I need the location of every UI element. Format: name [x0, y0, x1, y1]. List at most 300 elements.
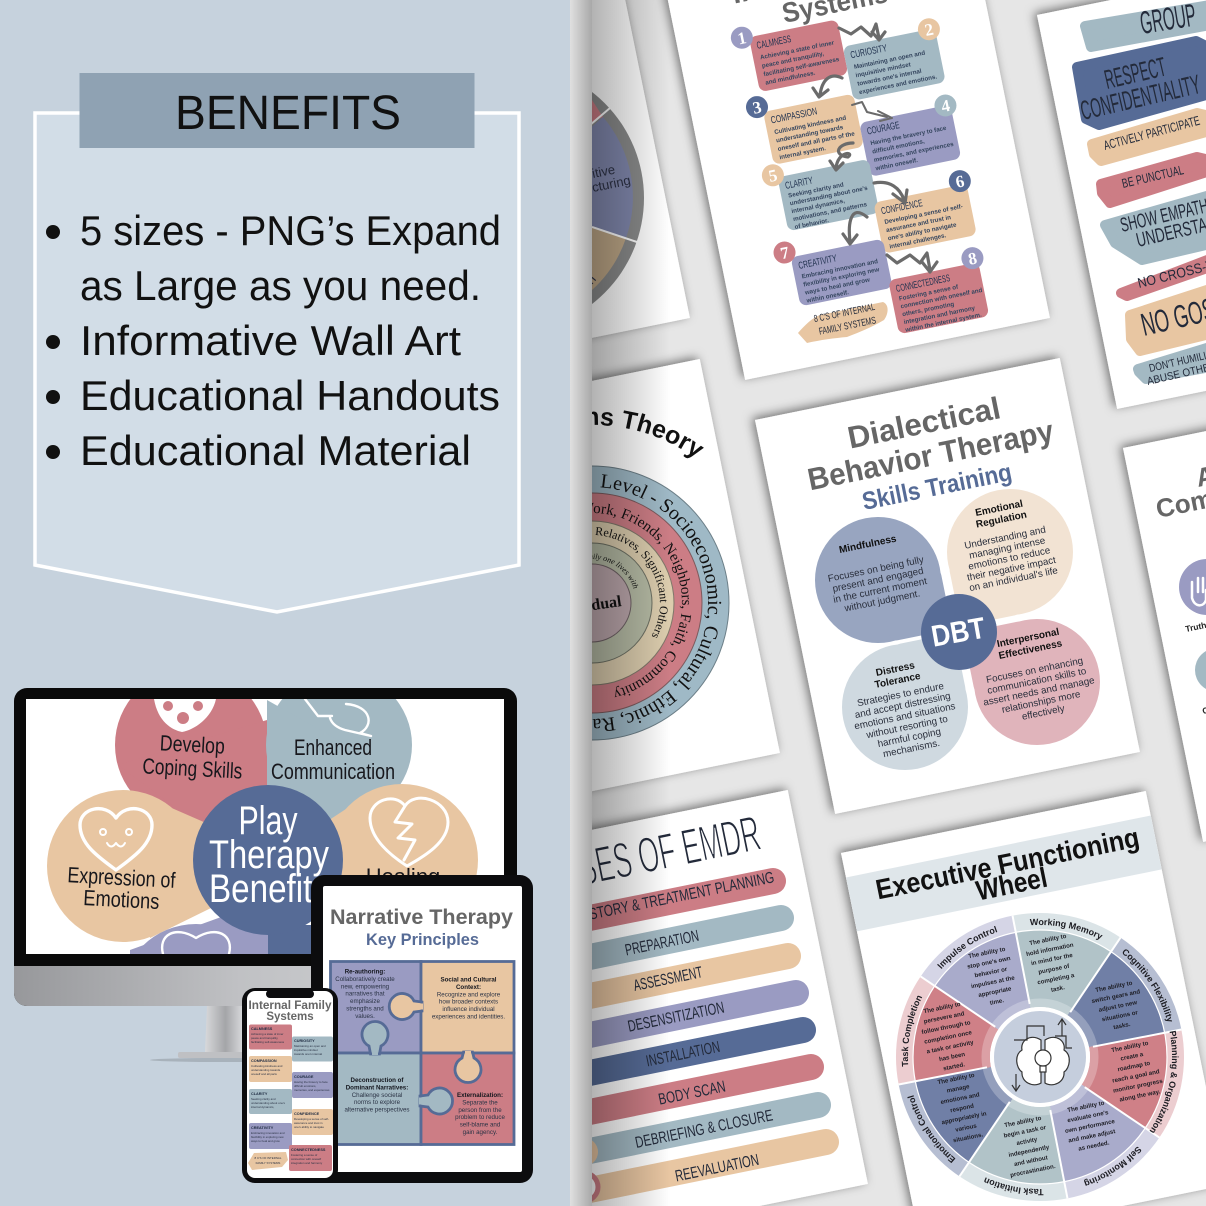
tablet screen: [323, 886, 522, 1172]
number badges: 1: [736, 28, 748, 48]
wheel segment descriptions: own performance: [1064, 1118, 1116, 1135]
phone mini boxes: CONNECTEDNESS: [291, 1148, 326, 1152]
card: group rules: [1037, 0, 1206, 409]
phone mini boxes: flexibility in exploring new: [251, 1135, 285, 1139]
petal: mindfulness: Focuses on being fully: [827, 555, 925, 585]
petal: distress tolerance: and accept distressing: [854, 691, 952, 721]
box: calmness: [749, 19, 848, 92]
petal: enhanced communication: Communication: [271, 759, 395, 784]
box: curiosity: CURIOSITY: [850, 43, 888, 61]
box: courage: COURAGE: [866, 120, 901, 138]
petal: healing: [268, 784, 478, 936]
box: connectedness: [888, 262, 989, 335]
box: clarity: understanding about one's: [789, 185, 869, 207]
box: courage: [859, 104, 961, 177]
box: confidence: assurance and trust in: [886, 214, 952, 234]
box: clarity: Seeking clarity and: [788, 181, 844, 200]
box: confidence: internal challenges.: [889, 232, 947, 251]
petal: enhanced communication: [266, 672, 412, 860]
number badges: 2: [923, 20, 935, 40]
phone mini boxes: COURAGE: [294, 1075, 314, 1079]
petal: emotional regulation: their negative impact: [966, 555, 1057, 584]
DBT title: Behavior Therapy: [805, 413, 1057, 497]
petal: coping skills: Develop: [159, 730, 226, 759]
box: compassion: [763, 94, 864, 165]
petal: interpersonal effectiveness: effectively: [1021, 703, 1066, 723]
hub: play therapy benefits: Play: [238, 799, 298, 843]
wheel segment descriptions: purpose of: [1038, 963, 1071, 976]
box: creativity: Embracing innovation and: [801, 258, 879, 281]
device: tablet: [311, 875, 533, 1183]
wheel segment descriptions: respond: [950, 1103, 975, 1114]
box: compassion: Cultivating kindness and: [774, 115, 847, 136]
phone mini boxes: one's ability to navigate: [294, 1125, 324, 1129]
hub: play therapy benefits: Benefits: [209, 867, 329, 911]
petal: emotional regulation: [947, 489, 1073, 620]
wheel segment descriptions: stop one's own: [967, 955, 1011, 971]
phone mini boxes: Embracing innovation and: [251, 1131, 285, 1135]
petal: expression of emotions: [47, 790, 268, 942]
petal: interpersonal effectiveness: Effectiveness: [998, 638, 1064, 662]
shadow gradient over cards: [592, 0, 670, 1206]
wheel segment descriptions: various: [955, 1122, 978, 1134]
chart: partial therapy wheel: n: [583, 272, 599, 287]
wheel segment descriptions: impulses at the: [970, 974, 1016, 990]
box: curiosity: inquisitive mindset: [855, 61, 911, 79]
box: calmness: Achieving a state of inner: [760, 40, 835, 61]
number badges: [730, 18, 984, 270]
phone mini boxes: COMPASSION: [251, 1059, 277, 1063]
phone mini boxes: Achieving a state of inner: [251, 1032, 283, 1036]
rule labels: [1078, 0, 1206, 388]
card: communication (partial): [1123, 386, 1206, 842]
box: courage: memories, and experiences: [873, 141, 955, 164]
puzzle text: social and cultural context: influence individual: [442, 1006, 495, 1013]
puzzle text: externalization: problem to reduce: [455, 1114, 505, 1121]
phase labels: REEVALUATION: [674, 1152, 760, 1185]
box: calmness: peace and tranquility,: [761, 50, 825, 70]
number badges: 3: [751, 97, 763, 118]
arrows between IFS boxes: [813, 24, 937, 272]
petal: mindfulness: in the current moment: [832, 576, 928, 606]
phase labels: DESENSITIZATION: [626, 999, 726, 1036]
concentric rings chart: Work, Friends, Neighbors, Faith, Community: [592, 502, 692, 698]
monitor screen: play therapy benefits: [47, 669, 478, 1076]
icon: open communication: [1195, 648, 1206, 716]
phone title: Internal Family: [248, 1000, 332, 1012]
heading: BENEFITS: BENEFITS: [175, 87, 401, 140]
petal: mindfulness: Mindfulness: [838, 534, 898, 556]
wheel segment descriptions: persevere and: [923, 1010, 965, 1025]
wheel outer band: [896, 913, 1184, 1201]
phone mini boxes: oneself and all parts: [251, 1072, 277, 1076]
box: curiosity: [843, 28, 946, 101]
DBT title: Dialectical: [845, 390, 1003, 455]
monitor body: [14, 688, 517, 1006]
box: clarity: motivations, and patterns: [792, 201, 868, 223]
phase number tokens: [592, 1140, 600, 1202]
number badges: 8: [966, 249, 979, 269]
box: calmness: CALMNESS: [756, 34, 792, 52]
puzzle text: deconstruction: Deconstruction of: [351, 1077, 404, 1084]
wheel segment descriptions: appropriate: [978, 985, 1013, 999]
device: phone: [242, 988, 338, 1183]
wheel segment descriptions: The ability to: [937, 1072, 975, 1086]
benefits list: Educational Handouts: [80, 372, 500, 419]
box: clarity: of behavior.: [794, 217, 830, 231]
box: calmness: and mindfulness.: [765, 70, 816, 87]
wheel inner segments: [917, 934, 1163, 1180]
wheel segment descriptions: switch gears and: [1091, 988, 1141, 1005]
wheel labels: Planning & Organization: [1150, 1030, 1179, 1133]
box: clarity: CLARITY: [784, 176, 814, 192]
DBT title: Skills Training: [860, 458, 1014, 516]
box: creativity: CREATIVITY: [798, 253, 838, 272]
puzzle text: social and cultural context: experiences and identities.: [432, 1014, 505, 1020]
phase labels: INSTALLATION: [645, 1039, 722, 1070]
box: confidence: CONFIDENCE: [880, 198, 924, 217]
executive functioning wheel: [896, 913, 1184, 1201]
card: cognitive wheel (partial): [592, 0, 692, 342]
wheel segment descriptions: completion once: [924, 1029, 973, 1046]
wheel labels: Working Memory: [1030, 918, 1103, 940]
petal: distress tolerance: Distress: [875, 660, 916, 679]
puzzle text: re-authoring: Collaboratively create: [335, 976, 395, 983]
card: Executive Functioning Wheel: [832, 784, 1206, 1206]
phone mini boxes: assurance and trust in: [294, 1121, 323, 1125]
phone mini boxes: CONFIDENCE: [294, 1112, 320, 1116]
petal: mindfulness: without judgment.: [843, 588, 921, 615]
box: creativity: [791, 239, 893, 306]
box: connectedness: others, promoting: [902, 301, 955, 318]
phone mini boxes: understanding about one's: [251, 1101, 286, 1105]
box: connectedness: connection with oneself and: [900, 287, 983, 310]
hub: play therapy benefits: [193, 785, 343, 935]
puzzle diagram: [330, 962, 514, 1144]
card: Dialectical Behavior Therapy: [755, 358, 1140, 814]
wheel segment descriptions: and without: [1013, 1154, 1048, 1168]
card: Systems Theory: [592, 352, 782, 795]
puzzle text: re-authoring: Re-authoring:: [345, 968, 385, 976]
left panel background: [0, 0, 570, 1206]
phone mini boxes: Cultivating kindness and: [251, 1064, 283, 1068]
box: connectedness: integration and harmony: [903, 305, 976, 326]
puzzle text: re-authoring: narratives that: [345, 991, 385, 998]
phone mini boxes: Having the bravery to face: [294, 1080, 328, 1084]
wheel segment descriptions: appropriately in: [941, 1110, 987, 1126]
concentric rings chart: Individual: [550, 593, 623, 620]
petal: enhanced communication: Enhanced: [294, 735, 372, 760]
wheel segment descriptions: The ability to: [968, 946, 1006, 960]
panel: benefits ribbon: [35, 113, 519, 612]
monitor stand: [150, 1006, 290, 1062]
box: courage: Having the bravery to face: [870, 125, 947, 147]
phone mini boxes: memories, and experiences: [294, 1088, 330, 1092]
petal: interpersonal effectiveness: assert needs and manage: [982, 675, 1096, 709]
wheel segment descriptions: evaluate one's: [1067, 1109, 1110, 1124]
box: curiosity: towards one's internal: [857, 68, 923, 88]
shadow strip beside panel: [570, 0, 592, 1206]
wheel segment descriptions: [917, 932, 1166, 1179]
petal: coping skills: [115, 669, 267, 860]
puzzle text: deconstruction: norms to explore: [354, 1099, 401, 1106]
wheel segment descriptions: behavior or: [974, 966, 1008, 979]
phone screen: [247, 991, 333, 1178]
phase labels: HISTORY & TREATMENT PLANNING: [576, 869, 776, 926]
benefits list: [46, 207, 501, 474]
Systems Theory title: Systems Theory: [592, 410, 704, 458]
puzzle text: externalization: self-blame and: [460, 1122, 501, 1129]
title banner: Executive Functioning: [873, 822, 1142, 905]
phase labels: ASSESSMENT: [632, 964, 704, 995]
petal: distress tolerance: without resorting to: [864, 714, 949, 741]
wheel segment descriptions: independently: [1008, 1144, 1050, 1159]
phone title: [248, 1000, 332, 1023]
benefits list: as Large as you need.: [80, 262, 481, 309]
phone mini boxes: 8 C'S OF INTERNAL: [255, 1156, 282, 1160]
tablet title: Key Principles: [366, 930, 479, 949]
center badge: DBT: DBT: [929, 612, 988, 654]
petal: distress tolerance: Tolerance: [874, 671, 922, 691]
puzzle text: deconstruction: Dominant Narratives:: [346, 1084, 408, 1091]
number badges: 5: [767, 166, 779, 186]
wheel labels: [902, 918, 1179, 1196]
center badge: DBT: [921, 594, 997, 670]
wheel labels: Task Completion: [902, 996, 922, 1067]
petal: distress tolerance: mechanisms.: [882, 738, 941, 760]
phase labels: DEBRIEFING & CLOSURE: [634, 1107, 774, 1152]
wheel segment descriptions: situations or: [1101, 1009, 1139, 1023]
box: creativity: within oneself.: [805, 289, 850, 305]
box: creativity: ways to heal and grow: [803, 277, 871, 297]
petal: bottom purple: [120, 900, 272, 1076]
petal: emotional regulation: Understanding and: [963, 525, 1047, 552]
puzzle text: externalization: Separate the: [462, 1099, 498, 1106]
petal: bottom dark: [268, 925, 313, 955]
wheel segment descriptions: tasks.: [1113, 1021, 1131, 1031]
phone mini boxes: difficult emotions,: [294, 1084, 316, 1088]
benefits list: Educational Material: [80, 427, 471, 474]
wheel segment descriptions: follow through to: [921, 1019, 971, 1036]
phase labels: PREPARATION: [624, 928, 701, 959]
box: curiosity: Maintaining an open and: [853, 50, 926, 71]
brush caption: [798, 302, 888, 343]
card: Phases of EMDR: [592, 782, 870, 1206]
box: curiosity: experiences and emotions.: [858, 73, 938, 96]
phase labels: [592, 872, 774, 1182]
puzzle text: deconstruction: Challenge societal: [352, 1092, 402, 1099]
tablet body: [311, 875, 533, 1183]
wheel segment descriptions: create a: [1120, 1051, 1144, 1063]
benefits list: Informative Wall Art: [80, 317, 461, 364]
petal: emotional regulation: Regulation: [975, 510, 1028, 531]
EMDR title: PHASES OF EMDR: [519, 805, 765, 908]
petal: emotional regulation: Emotional: [974, 499, 1024, 519]
box: compassion: internal system.: [779, 145, 827, 161]
puzzle text: externalization: gain agency.: [463, 1129, 498, 1136]
phase labels: BODY SCAN: [657, 1078, 727, 1109]
petal: interpersonal effectiveness: Interpersonal: [996, 627, 1060, 650]
phone mini boxes: CLARITY: [251, 1092, 268, 1096]
wheel segment descriptions: The ability to: [1067, 1100, 1105, 1114]
phone mini boxes: ways to heal and grow: [251, 1139, 281, 1143]
petal: expression of emotions: Emotions: [83, 885, 160, 914]
wheel labels: Cognitive Flexibility: [1122, 949, 1172, 1022]
heading: BENEFITS: [80, 73, 474, 148]
wheel segment descriptions: in mind for the: [1030, 952, 1074, 967]
wheel segment descriptions: adjust to new: [1098, 999, 1138, 1014]
phone notch: [266, 990, 314, 998]
petal: interpersonal effectiveness: [970, 619, 1100, 745]
concentric rings chart: Family one lives with: [592, 554, 638, 589]
wheel segment descriptions: The ability to: [923, 1001, 961, 1015]
title banner: [846, 815, 1162, 931]
phone mini boxes: peace and tranquility,: [251, 1036, 278, 1040]
communication title: [1153, 460, 1206, 524]
phone mini boxes: CREATIVITY: [251, 1126, 274, 1130]
phone mini boxes: Maintaining an open and: [294, 1044, 326, 1048]
puzzle text: re-authoring: values.: [355, 1013, 375, 1020]
wheel segment descriptions: emotions and: [940, 1091, 980, 1106]
box: calmness: facilitating self-awareness: [763, 56, 840, 78]
wheel labels: Task Initiation: [984, 1177, 1044, 1196]
puzzle text: re-authoring: emphasize: [350, 998, 381, 1005]
puzzle text: externalization: person from the: [458, 1107, 502, 1114]
wheel segment descriptions: activity: [1016, 1136, 1038, 1147]
phone mini boxes: understanding towards: [251, 1068, 281, 1072]
wheel segment descriptions: a task or activity: [926, 1039, 975, 1055]
phone mini boxes: integration and harmony: [291, 1161, 323, 1165]
wheel segment descriptions: task.: [1050, 984, 1066, 994]
wheel segment descriptions: procrastination.: [1010, 1163, 1056, 1179]
wheel segment descriptions: as needed.: [1078, 1139, 1110, 1153]
wheel segment descriptions: monitor progress: [1112, 1078, 1164, 1095]
wheel segment descriptions: situations.: [952, 1131, 984, 1144]
puzzle text: re-authoring: strengths and: [346, 1006, 384, 1012]
petal: interpersonal effectiveness: relationships more: [1001, 689, 1082, 716]
petal: emotional regulation: emotions to reduce: [967, 545, 1052, 573]
box: clarity: [777, 159, 880, 232]
box: courage: within oneself.: [874, 157, 919, 173]
petal: mindfulness: present and engaged: [832, 566, 925, 595]
box: creativity: flexibility in exploring new: [803, 266, 880, 289]
wheel segment descriptions: The ability to: [1095, 980, 1133, 994]
chart: partial therapy wheel: itive: [591, 162, 616, 181]
box: connectedness: within the internal system.: [904, 311, 983, 334]
phone mini boxes: facilitating self-awareness: [251, 1040, 285, 1044]
puzzle text: social and cultural context: how broader contexts: [439, 999, 498, 1006]
box: confidence: Developing a sense of self-: [884, 203, 963, 226]
icon: truthfulness hand: [1179, 559, 1206, 634]
petal: healing: Healing: [366, 864, 440, 889]
wheel labels: Emotional Control: [907, 1095, 956, 1164]
tablet title: Narrative Therapy: [330, 906, 513, 929]
wheel segment descriptions: The ability to: [1029, 933, 1067, 947]
blobs: rule shapes: [1077, 5, 1206, 379]
box: compassion: understanding towards: [775, 124, 844, 144]
phone mini boxes: [248, 1024, 333, 1171]
box: confidence: one's ability to navigate: [887, 221, 958, 242]
phone mini boxes: Seeking clarity and: [251, 1097, 276, 1101]
puzzle text: externalization: Externalization:: [457, 1092, 503, 1099]
wheel labels: Self Monitoring: [1084, 1146, 1142, 1186]
wheel segment descriptions: begin a task or: [1003, 1124, 1047, 1140]
phone mini boxes: CALMNESS: [251, 1027, 273, 1031]
wheel segment descriptions: reach a goal and: [1112, 1068, 1160, 1085]
wheel segment descriptions: The ability to: [1111, 1040, 1149, 1054]
puzzle text: social and cultural context: Recognize and explore: [437, 991, 501, 998]
wheel segment descriptions: hold information: [1026, 942, 1074, 958]
number badges: 4: [939, 96, 952, 116]
petal: distress tolerance: emotions and situations: [853, 701, 957, 732]
phase bars: [560, 881, 826, 1196]
phone mini boxes: towards one's internal: [294, 1052, 322, 1056]
tablet title: [330, 906, 513, 949]
petal: distress tolerance: harmful coping: [877, 726, 942, 750]
wheel segment descriptions: time.: [989, 997, 1005, 1007]
chart: partial therapy wheel: [592, 92, 644, 304]
title banner: Wheel: [973, 862, 1050, 906]
puzzle text: social and cultural context: Context:: [456, 984, 481, 991]
wheel segment descriptions: and make adjust: [1068, 1128, 1116, 1145]
puzzle text: deconstruction: alternative perspectives: [344, 1107, 410, 1114]
phone mini boxes: inquisitive mindset: [294, 1048, 318, 1052]
box: confidence: [873, 184, 977, 254]
box: compassion: oneself and all parts of the: [777, 130, 856, 153]
petal: interpersonal effectiveness: Focuses on enhancing: [985, 656, 1084, 686]
phone body: [242, 988, 338, 1183]
puzzle text: re-authoring: new, empowering: [341, 983, 390, 990]
brush caption: 8 C'S OF INTERNAL: [813, 302, 876, 325]
wheel hub: brain and bulb icon: [992, 1009, 1088, 1105]
number badges: 6: [954, 171, 966, 192]
petal: expression of emotions: Expression of: [67, 862, 177, 893]
phone mini boxes: Fostering a sense of: [291, 1153, 317, 1157]
brush caption: FAMILY SYSTEMS: [818, 315, 877, 338]
phone mini boxes: internal dynamics,: [251, 1105, 274, 1109]
concentric rings chart: Level - Socioeconomic, Cultural, Ethnic, Racial: [592, 474, 722, 731]
benefits list: 5 sizes - PNG’s Expand: [80, 207, 501, 254]
petal: distress tolerance: Strategies to endure: [856, 681, 945, 709]
hub: play therapy benefits: Therapy: [209, 833, 329, 877]
box: clarity: internal dynamics,: [791, 197, 846, 215]
IFS contents: [730, 0, 988, 334]
petal: interpersonal effectiveness: communication skills to: [986, 666, 1088, 697]
card collage: [592, 0, 1206, 1206]
chart: partial therapy wheel: cturing: [591, 172, 632, 195]
box: connectedness: Fostering a sense of: [898, 284, 959, 303]
phone mini boxes: FAMILY SYSTEMS: [256, 1161, 280, 1165]
wheel segment descriptions: The ability to: [1004, 1115, 1042, 1129]
wheel segment descriptions: along the way.: [1119, 1088, 1161, 1104]
petal: distress tolerance: [842, 639, 968, 770]
wheel segment descriptions: completing a: [1037, 972, 1076, 986]
box: compassion: COMPASSION: [770, 106, 818, 126]
puzzle text: social and cultural context: Social and Cultural: [440, 976, 497, 984]
wheel segment descriptions: manage: [946, 1083, 971, 1095]
wheel labels: Impulse Control: [937, 926, 998, 969]
box: connectedness: CONNECTEDNESS: [895, 273, 951, 295]
IFS title: [735, 0, 887, 25]
wheel segment descriptions: roadmap to: [1117, 1060, 1151, 1073]
card: Internal Family Systems: [665, 0, 1050, 380]
phone title: Systems: [266, 1011, 314, 1023]
phone mini boxes: CURIOSITY: [294, 1039, 315, 1043]
wheel segment descriptions: started.: [943, 1061, 966, 1073]
wheel segment descriptions: has been: [938, 1051, 966, 1063]
petal: emotional regulation: managing intense: [968, 535, 1047, 562]
petal: emotional regulation: on an individual's life: [968, 565, 1059, 594]
